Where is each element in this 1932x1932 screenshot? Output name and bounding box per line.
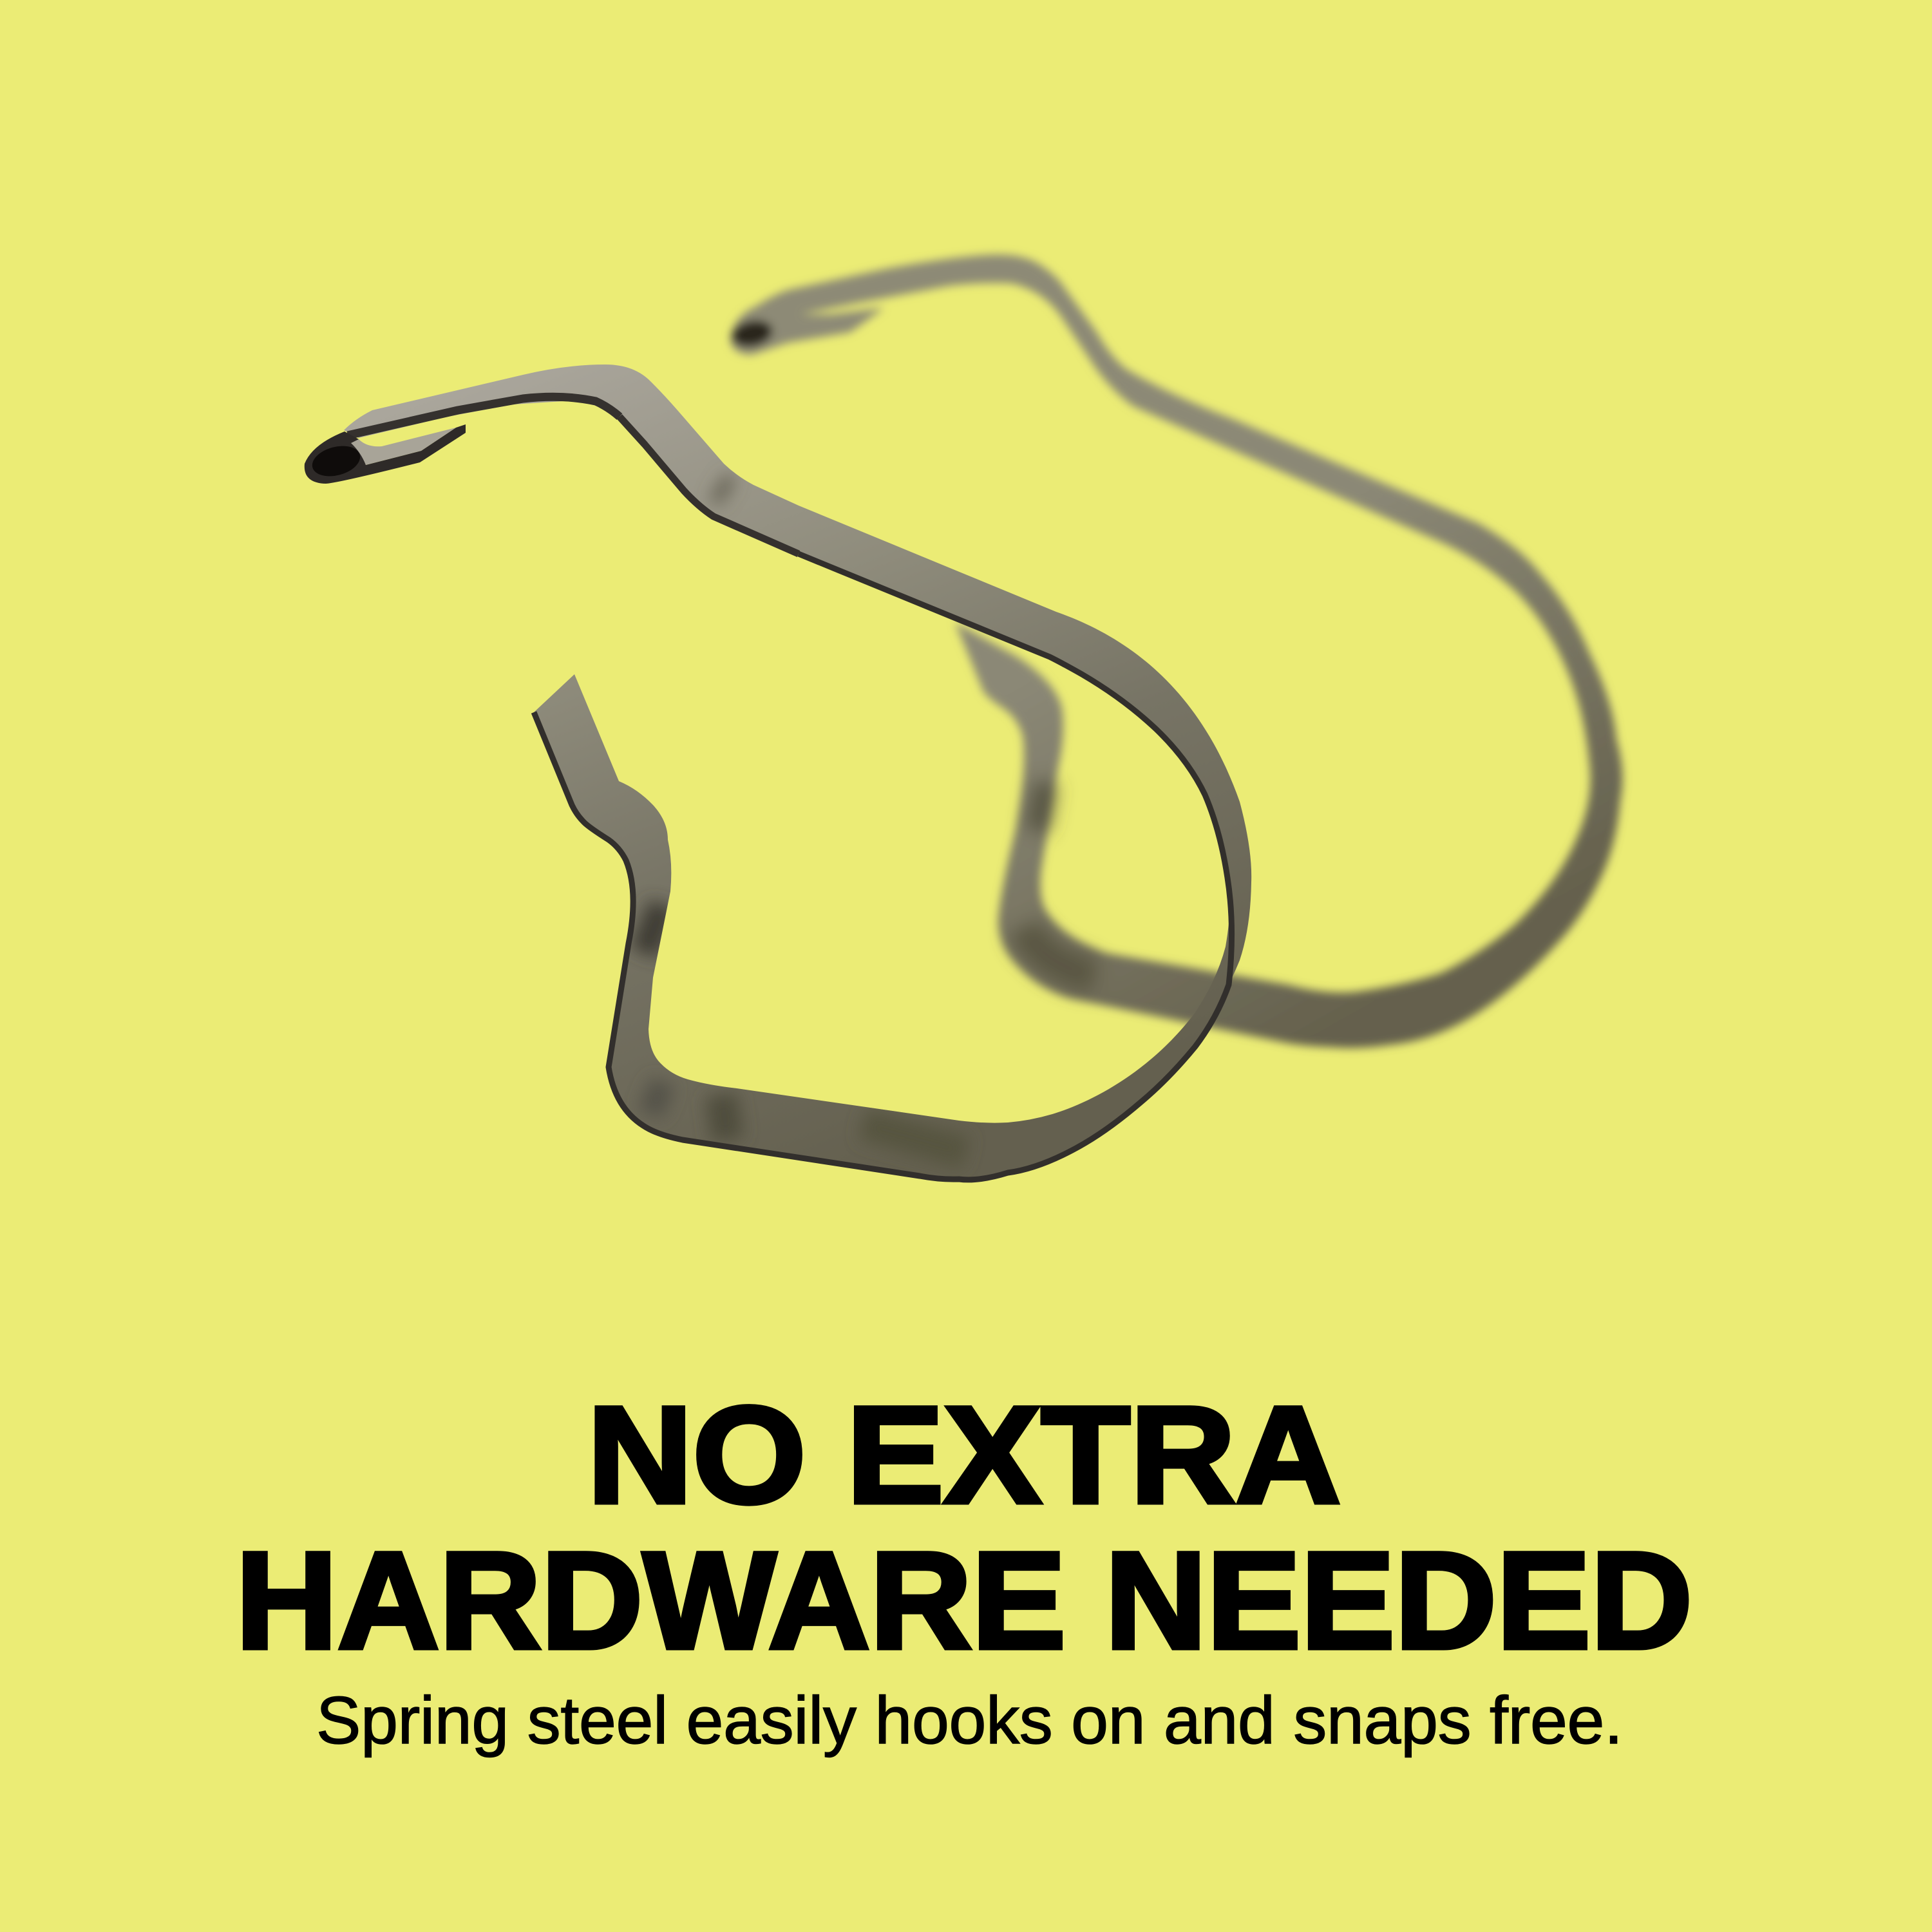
headline line 1: NO EXTRA [587, 1378, 1341, 1532]
subheading: Spring steel easily hooks on and snaps free. [316, 1683, 1623, 1758]
blurred rear spring steel hook [730, 254, 1622, 1048]
folded hook tip [305, 424, 466, 484]
headline line 2: HARDWARE NEEDED [236, 1524, 1692, 1678]
dark metal edge, strap bend [620, 417, 799, 554]
sharp front spring steel hook [344, 365, 1251, 1180]
dark metal edge, upper strap [348, 397, 620, 435]
dark metal edge, curve and lower strap [534, 554, 1232, 1180]
